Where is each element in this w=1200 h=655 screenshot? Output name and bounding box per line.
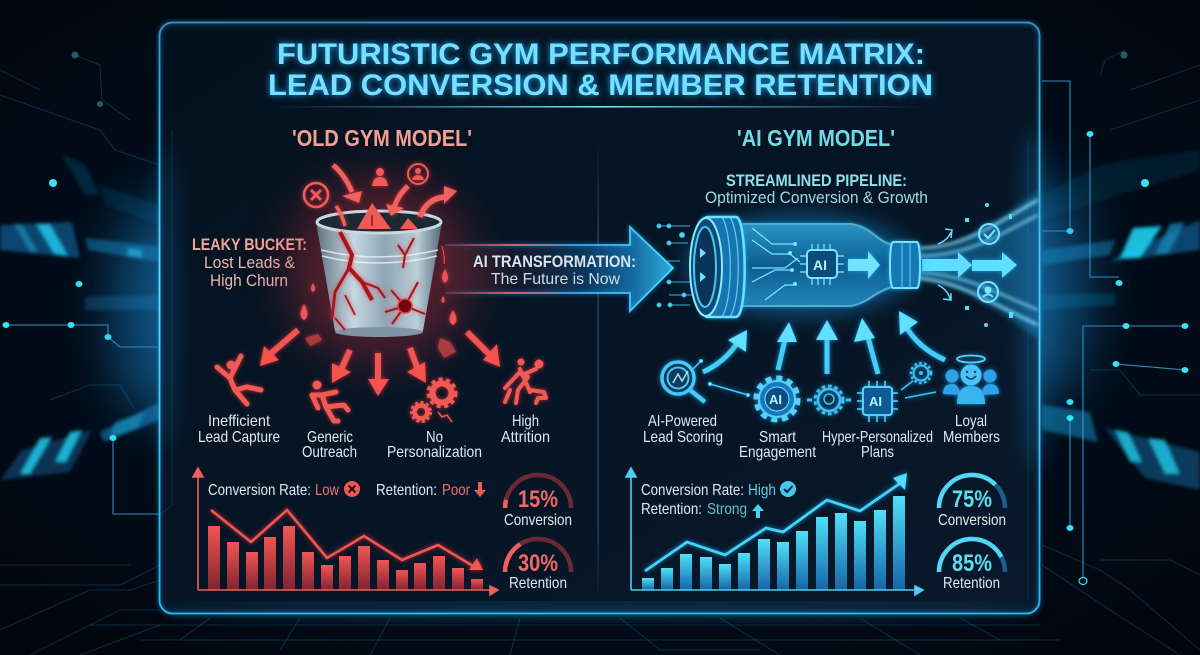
legend: retention poor (376, 482, 486, 499)
label: Hyper-Personalized (822, 429, 933, 446)
icon: falling person (217, 356, 261, 404)
icon: broken gears (412, 380, 456, 422)
label (739, 429, 816, 461)
label: ai transformation: AI TRANSFORMATION: (473, 252, 636, 271)
legend: conversion rate low: Conversion Rate: (208, 482, 311, 499)
item: generic outreach (302, 380, 357, 461)
gauge: 75% conversion: 75% (952, 486, 992, 513)
label (302, 429, 357, 461)
text block: leaky bucket: High Churn (210, 271, 288, 290)
label: Loyal (955, 413, 987, 430)
icon: happy members (943, 356, 999, 404)
item: high attrition (501, 358, 550, 446)
icon: ai processor: AI (869, 394, 882, 409)
arrows feeding pipeline (703, 311, 945, 374)
text block: leaky bucket: LEAKY BUCKET: (192, 235, 307, 254)
text block: streamlined pipeline: Optimized Conversion & Growth (705, 188, 928, 207)
label: Lead Capture (198, 429, 280, 446)
icon: pipeline bottle (657, 213, 920, 317)
panel: ai gym model (626, 125, 1040, 595)
gauge: 15% conversion (504, 475, 572, 529)
bars (642, 496, 905, 590)
item: hyper-personalized plans (822, 381, 933, 461)
icon: cross circle (304, 183, 328, 207)
label: Generic (307, 429, 353, 446)
item: inefficient lead capture (198, 356, 280, 446)
icon: arrows into bucket (333, 165, 457, 226)
legend: retention strong: Retention: (641, 501, 702, 518)
label: High (512, 413, 539, 430)
icon: headset gear (807, 386, 851, 414)
icon: output streams (918, 190, 1040, 340)
icon: small settings gear (901, 363, 936, 398)
legend: retention strong (641, 501, 764, 518)
text block: leaky bucket: Lost Leads & (204, 253, 296, 272)
circuit traces (752, 228, 800, 300)
panel: old gym model (192, 125, 572, 595)
bar chart: old model decline (193, 468, 498, 595)
label: No (426, 429, 443, 446)
text block: streamlined pipeline: STREAMLINED PIPELINE: (726, 171, 907, 190)
legend: conversion rate low: Low (315, 482, 339, 499)
label: Plans (861, 444, 894, 461)
title: FUTURISTIC GYM PERFORMANCE MATRIX: (277, 38, 925, 71)
heading: ai gym model: 'AI GYM MODEL' (737, 125, 895, 151)
arrows out of bucket (260, 330, 500, 396)
axes (193, 468, 498, 595)
gauge: 15% conversion: 15% (518, 486, 558, 513)
bar chart: ai model growth (626, 468, 923, 595)
title: LEAD CONVERSION & MEMBER RETENTION (268, 69, 933, 102)
icon: attrition figures (505, 358, 546, 403)
label: Engagement (739, 444, 816, 461)
label (387, 429, 482, 461)
heading: old gym model: 'OLD GYM MODEL' (292, 125, 472, 151)
trend line (211, 510, 483, 570)
label: Personalization (387, 444, 482, 461)
legend: retention poor: Poor (442, 482, 471, 499)
item: smart engagement (739, 378, 851, 461)
icon: leaks and droplets (300, 246, 456, 325)
label: ai transformation: The Future is Now (491, 271, 620, 288)
legend: conversion rate high: High (748, 482, 776, 499)
icon: magnifier (662, 360, 750, 402)
main panel frame (150, 22, 1050, 617)
arrow: ai transformation (445, 227, 673, 311)
gauge: 30% retention: Retention (509, 575, 567, 592)
inflow dots (657, 224, 692, 307)
label: Members (943, 429, 1000, 446)
label: Attrition (501, 429, 550, 446)
gauge: 15% conversion: Conversion (504, 512, 572, 529)
trend line (645, 473, 907, 571)
icon: ai chip: AI (813, 257, 827, 273)
label (943, 413, 1000, 446)
text block: streamlined pipeline (705, 171, 928, 207)
item: ai-powered lead scoring (643, 360, 750, 446)
label: ai transformation (473, 252, 636, 288)
bars (208, 526, 483, 590)
gauge: 75% conversion: Conversion (938, 512, 1006, 529)
legend: retention poor: Retention: (376, 482, 437, 499)
label (822, 429, 933, 461)
axes (626, 468, 923, 595)
label: AI-Powered (648, 413, 717, 430)
label: Lead Scoring (643, 429, 723, 446)
gauge: 75% conversion (938, 475, 1006, 529)
label: Inefficient (208, 413, 270, 430)
label (643, 413, 723, 446)
gauge: 85% retention: 85% (952, 550, 992, 577)
icon: lost lead in circle (408, 164, 428, 184)
icon: slipping person (312, 380, 348, 421)
gauge: 30% retention (505, 539, 571, 592)
arrow inside pipeline (848, 251, 880, 279)
gauge: 85% retention (939, 539, 1005, 592)
legend: retention strong: Strong (707, 501, 747, 518)
text block: leaky bucket (192, 235, 307, 290)
label: Outreach (302, 444, 357, 461)
label (198, 413, 280, 446)
title (268, 38, 933, 102)
icon: lost lead person (372, 168, 388, 186)
icon: ai chip (800, 244, 844, 285)
label: Smart (759, 429, 796, 446)
item: loyal members (901, 356, 1000, 446)
gauge: 30% retention: 30% (518, 550, 558, 577)
legend: conversion rate high: Conversion Rate: (641, 482, 744, 499)
gauge: 85% retention: Retention (943, 575, 1000, 592)
item: no personalization (387, 380, 482, 461)
label (501, 413, 550, 446)
icon: leaky bucket (289, 180, 469, 360)
icon: ai gear: AI (769, 392, 782, 407)
